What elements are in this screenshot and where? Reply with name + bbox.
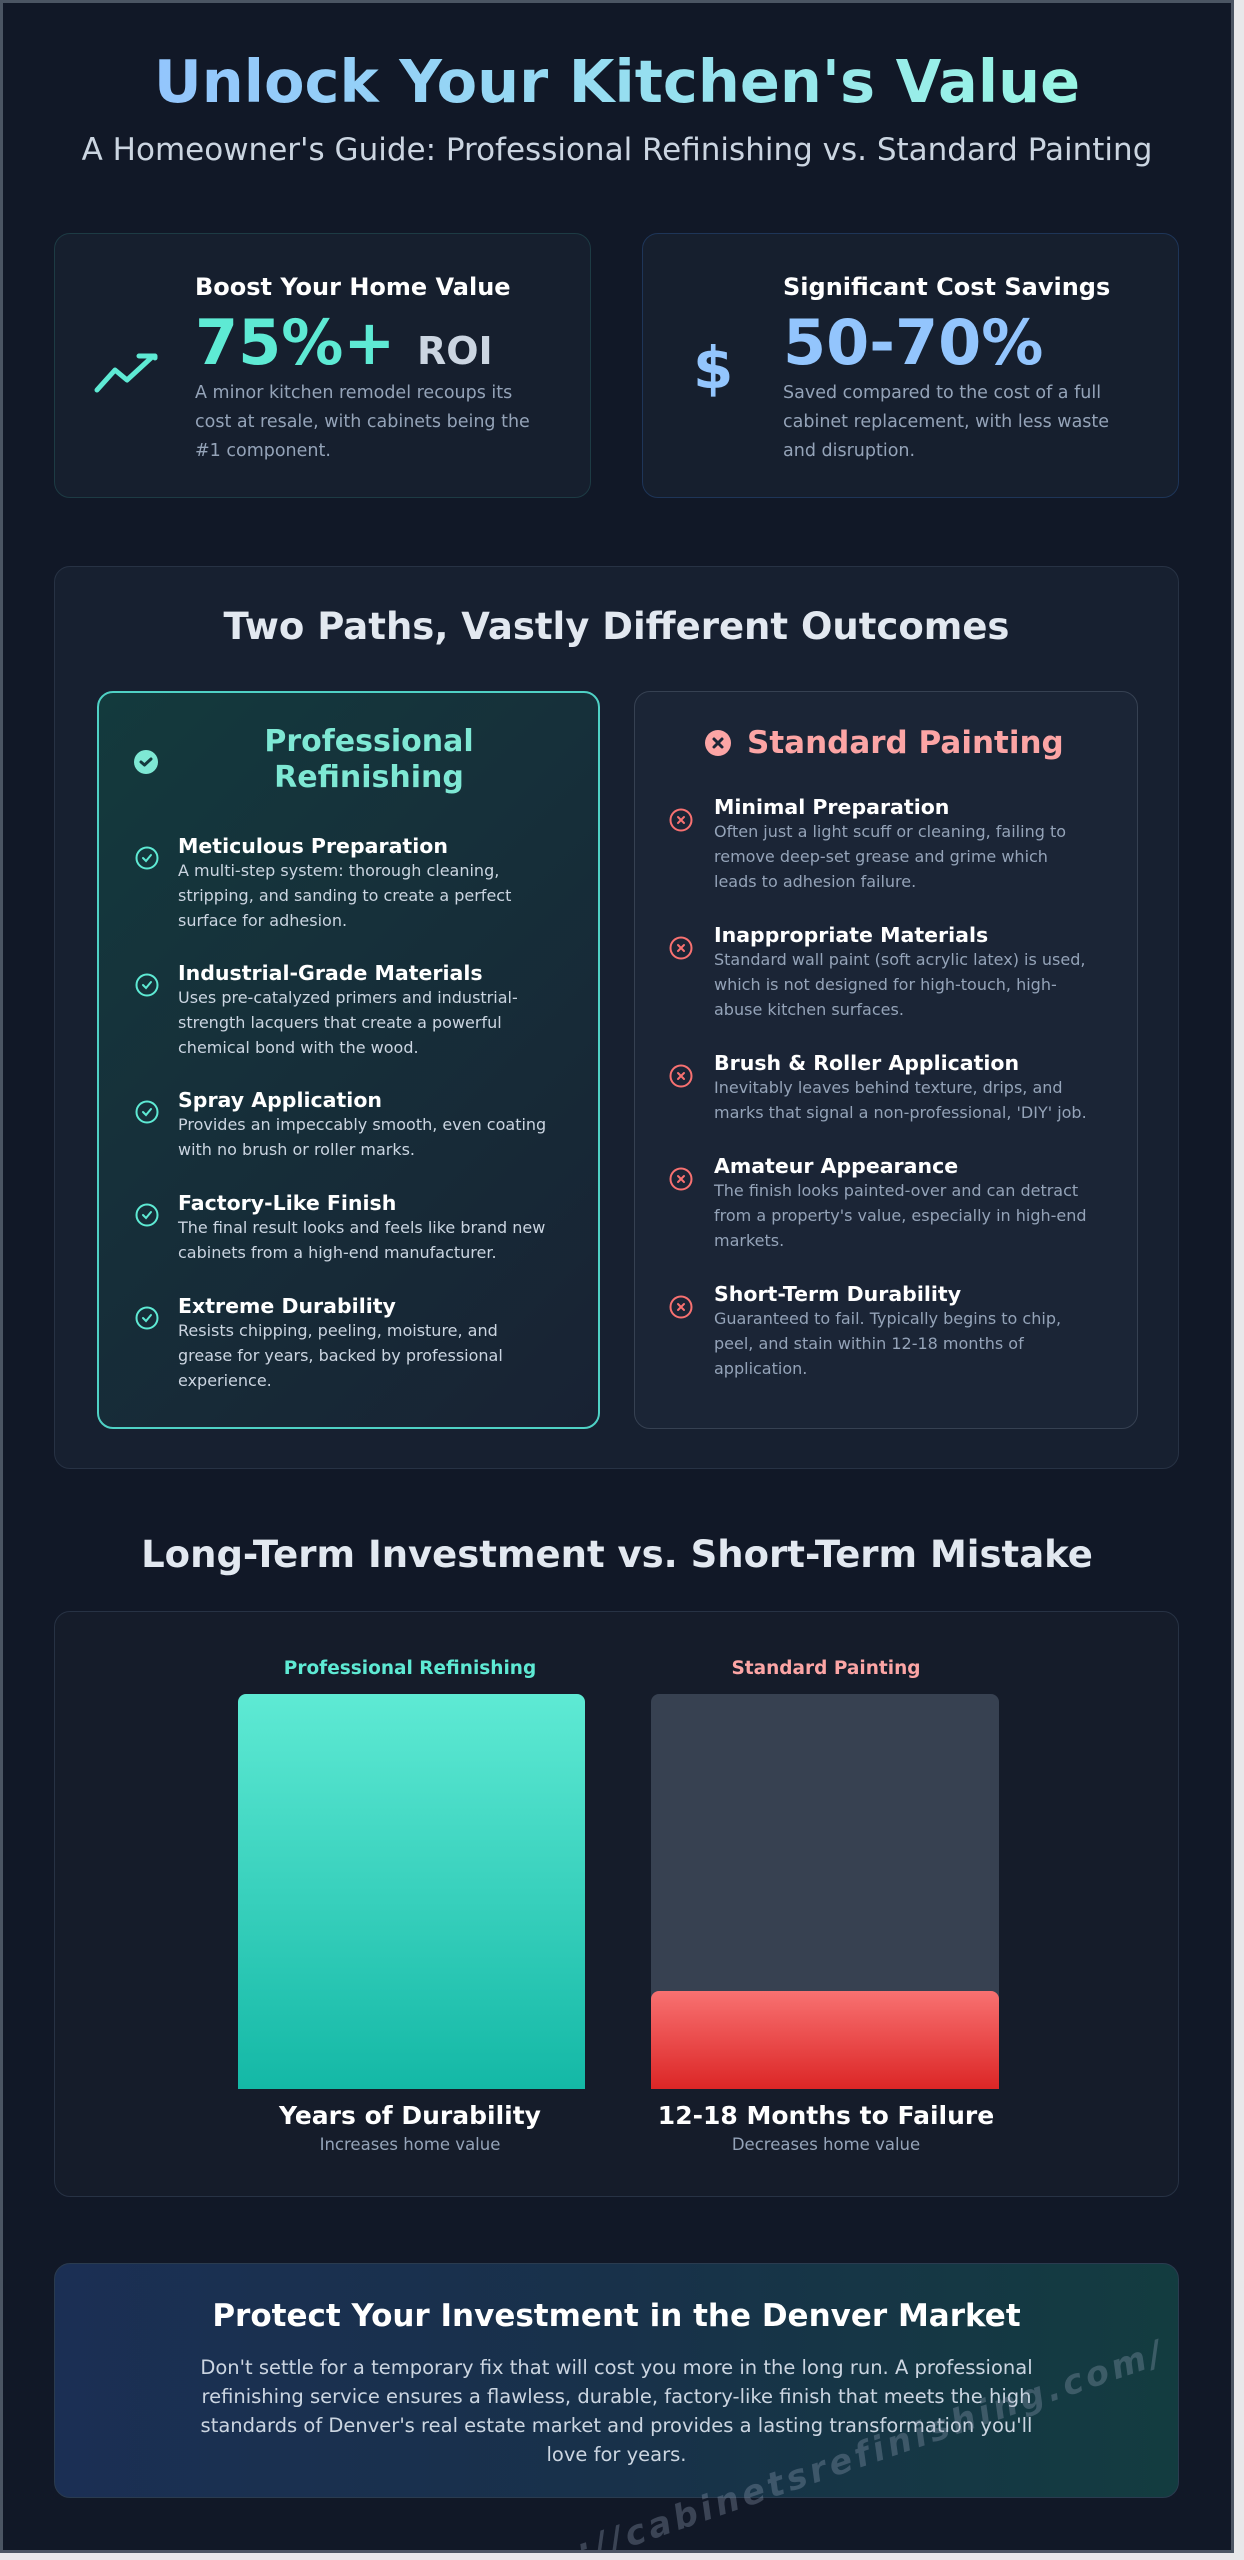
bar: professional refinishing <box>238 1658 585 2154</box>
item: brush and roller <box>670 1051 1087 1122</box>
heading: long-term investment: Long-Term Investment vs. Short-Term Mistake <box>141 1533 1093 1576</box>
stat heading: Boost Your Home Value <box>195 273 511 301</box>
item: extreme durability: Extreme Durability <box>178 1294 396 1318</box>
bar chart: durability <box>54 1611 1179 2197</box>
list: painting items <box>670 795 1087 1378</box>
item: inappropriate materials: Inappropriate Materials <box>714 923 988 947</box>
bar: standard painting: Standard Painting <box>731 1658 920 1679</box>
item: short-term durability <box>670 1282 1061 1378</box>
heading: two paths: Two Paths, Vastly Different Outcomes <box>224 605 1009 648</box>
item: factory-like finish <box>136 1191 545 1262</box>
panel: comparison <box>54 566 1179 1469</box>
icon: dollar: $ <box>693 334 733 402</box>
list: painting items: Guaranteed to fail. Typically begins to chip, peel, and stain within 12-18 months of application. <box>714 1309 1061 1378</box>
callout: denver market <box>54 2263 1179 2498</box>
stat heading: Significant Cost Savings <box>783 273 1110 301</box>
list: painting items: Inevitably leaves behind texture, drips, and marks that signal a non-professional, 'DIY' job. <box>714 1078 1087 1122</box>
item: extreme durability <box>136 1294 503 1390</box>
item: spray application <box>136 1088 546 1159</box>
stat card: home value <box>54 233 591 498</box>
item: spray application: Spray Application <box>178 1088 382 1112</box>
subtitle: A Homeowner's Guide: Professional Refinishing vs. Standard Painting <box>82 132 1152 168</box>
stat card: cost savings <box>642 233 1179 498</box>
item: minimal preparation <box>670 795 1066 891</box>
item: meticulous preparation: Meticulous Preparation <box>178 834 448 858</box>
list: professional items: Resists chipping, peeling, moisture, and grease for years, backed by professional experience. <box>178 1321 503 1390</box>
item: amateur appearance <box>670 1154 1087 1250</box>
bar: professional refinishing: Professional Refinishing <box>284 1658 536 1679</box>
title: Unlock Your Kitchen's Value <box>154 47 1080 116</box>
item: meticulous preparation <box>136 834 511 930</box>
panel: standard painting <box>634 691 1138 1429</box>
item: factory-like finish: Factory-Like Finish <box>178 1191 396 1215</box>
item: short-term durability: Short-Term Durability <box>714 1282 961 1306</box>
heading: professional refinishing: Professional <box>264 724 474 759</box>
item: industrial-grade materials <box>136 961 518 1057</box>
bar: standard painting <box>651 1658 999 2154</box>
stat number: 50-70% <box>783 306 1043 379</box>
list: painting items: The finish looks painted-over and can detract from a property's value, especially in high-end markets. <box>714 1181 1087 1250</box>
bar: professional refinishing: Years of Durability <box>279 2101 541 2130</box>
list: professional items: Uses pre-catalyzed primers and industrial-strength lacquers that create a powerful chemical bond with the wood. <box>178 988 518 1057</box>
item: inappropriate materials <box>670 923 1085 1019</box>
panel: professional refinishing <box>97 691 600 1429</box>
list: professional items: A multi-step system: thorough cleaning, stripping, and sanding to create a perfect surface for adhesion. <box>178 861 511 930</box>
stat description: Saved compared to the cost of a full cabinet replacement, with less waste and disruption. <box>783 383 1109 461</box>
list: painting items: Standard wall paint (soft acrylic latex) is used, which is not designed for high-touch, high-abuse kitchen surfaces. <box>714 950 1085 1019</box>
list: professional items <box>136 834 546 1390</box>
item: minimal preparation: Minimal Preparation <box>714 795 949 819</box>
callout text: Don't settle for a temporary fix that will cost you more in the long run. A professional refinishing service ensures a flawless, durable, factory-like finish that meets the high standards of Denver's real estate market and provides a lasting transformation you'll love for years. <box>200 2356 1033 2466</box>
bar: standard painting: Decreases home value <box>732 2135 920 2154</box>
stat number: 75%+ ROI <box>195 306 493 379</box>
item: amateur appearance: Amateur Appearance <box>714 1154 958 1178</box>
heading: professional refinishing: Refinishing <box>274 760 464 795</box>
item: brush and roller: Brush & Roller Application <box>714 1051 1019 1075</box>
bar: professional refinishing: Increases home value <box>320 2135 500 2154</box>
callout heading: Protect Your Investment in the Denver Market <box>212 2298 1021 2334</box>
heading: professional refinishing <box>264 724 474 795</box>
list: professional items: Provides an impeccably smooth, even coating with no brush or roller marks. <box>178 1115 546 1159</box>
icon: trending up <box>94 354 158 392</box>
heading: standard painting: Standard Painting <box>747 725 1064 761</box>
list: professional items: The final result looks and feels like brand new cabinets from a high-end manufacturer. <box>178 1218 545 1262</box>
bar: standard painting: 12-18 Months to Failure <box>658 2101 994 2130</box>
stat description: A minor kitchen remodel recoups its cost at resale, with cabinets being the #1 component. <box>195 383 530 461</box>
list: painting items: Often just a light scuff or cleaning, failing to remove deep-set grease and grime which leads to adhesion failure. <box>714 822 1066 891</box>
icon: x filled <box>705 730 731 756</box>
icon: check filled <box>134 750 158 774</box>
item: industrial-grade materials: Industrial-Grade Materials <box>178 961 483 985</box>
